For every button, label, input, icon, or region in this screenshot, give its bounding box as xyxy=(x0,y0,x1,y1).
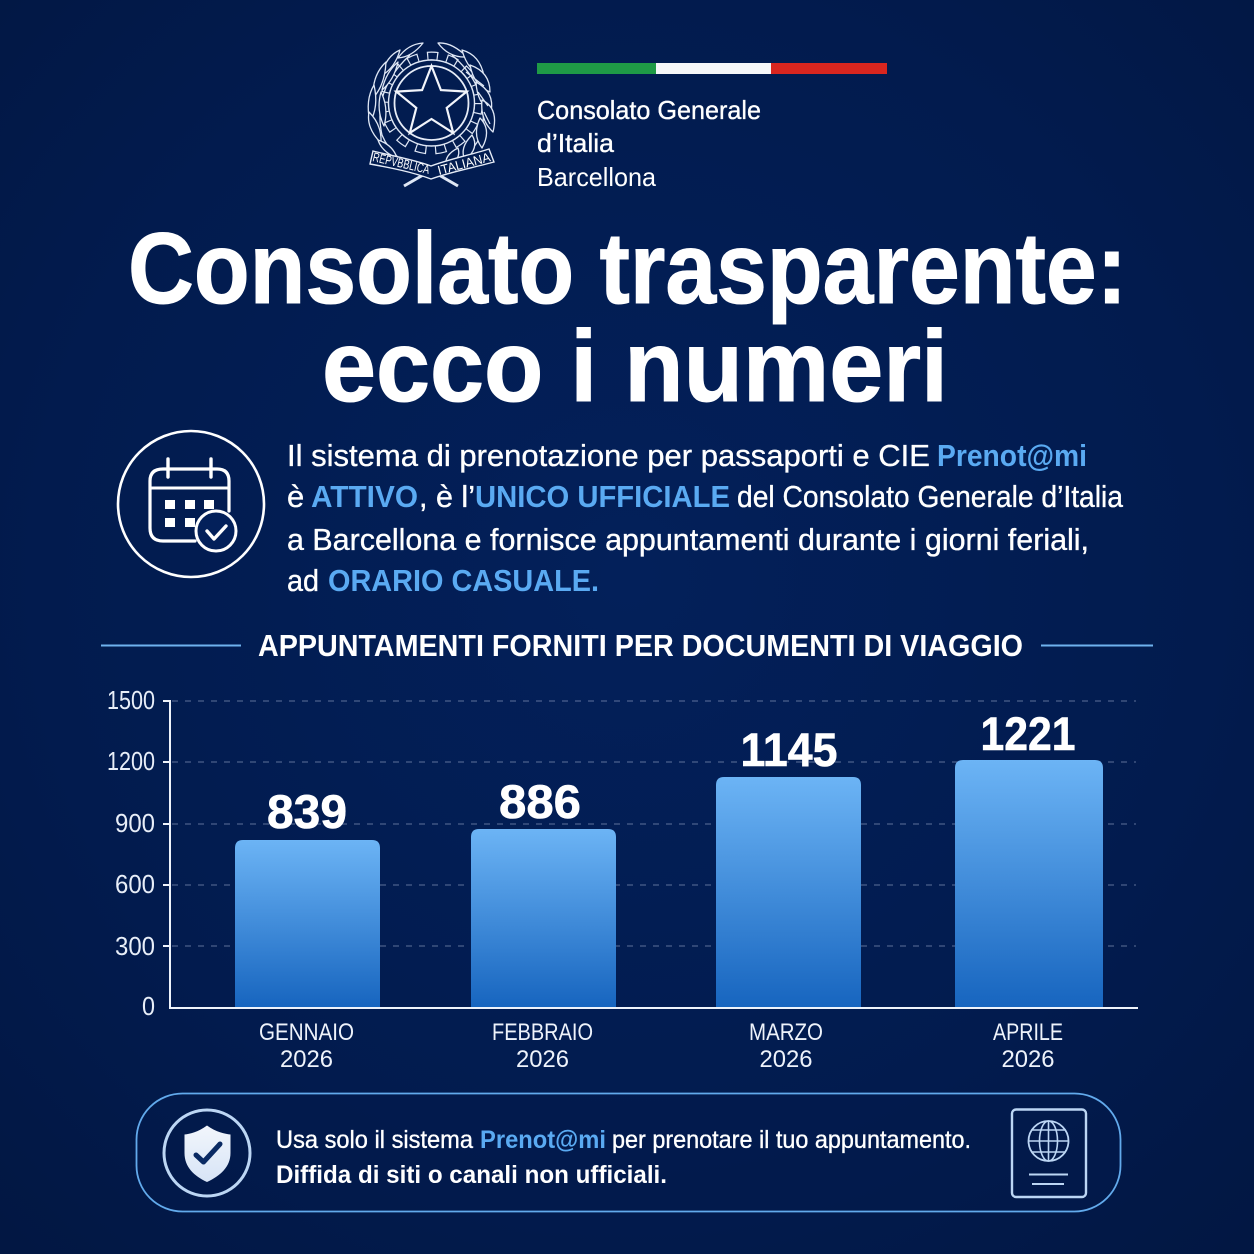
crossed branch ends xyxy=(404,171,458,186)
intro text: ad xyxy=(287,563,319,598)
month labels: APRILE xyxy=(993,1019,1063,1046)
bar: aprile 1221 xyxy=(955,707,1103,1007)
intro text: , è l’ xyxy=(419,479,475,514)
month labels: 2026 xyxy=(1002,1046,1054,1073)
icon: calendar with check xyxy=(118,431,264,577)
ribbon xyxy=(370,149,494,179)
ribbon lettering: REPVBBLICA xyxy=(371,149,431,177)
month labels: 2026 xyxy=(760,1046,812,1073)
intro text: a Barcellona e fornisce appuntamenti durante i giorni feriali, xyxy=(287,522,1089,557)
bar: marzo 1145: 1145 xyxy=(740,723,838,776)
intro text: è xyxy=(287,479,304,514)
header: consulate name: Barcellona xyxy=(537,162,657,192)
intro text: Il sistema di prenotazione per passaporti e CIE xyxy=(287,438,930,473)
panel: warning callout xyxy=(136,1094,1120,1212)
bar: gennaio 839: 839 xyxy=(267,785,347,838)
emblem: Repubblica Italiana xyxy=(368,43,495,186)
wheel ring xyxy=(394,66,468,140)
header: consulate name: Consolato Generale xyxy=(537,95,761,125)
bar: aprile 1221: 1221 xyxy=(980,707,1076,760)
right wreath xyxy=(432,43,495,178)
star xyxy=(396,66,467,133)
chart heading: APPUNTAMENTI FORNITI PER DOCUMENTI DI VIAGGIO xyxy=(258,628,1023,663)
month labels: 2026 xyxy=(516,1046,569,1073)
month labels: MARZO xyxy=(749,1019,823,1046)
callout text: Usa solo il sistema xyxy=(276,1126,473,1154)
callout text: Prenot@mi xyxy=(480,1126,606,1154)
left wreath xyxy=(368,43,430,178)
month labels: 2026 xyxy=(280,1046,333,1073)
y axis: 1500 xyxy=(107,685,155,715)
ribbon lettering right: ITALIANA xyxy=(436,149,492,178)
y axis: 600 xyxy=(115,869,155,899)
callout text: per prenotare il tuo appuntamento. xyxy=(612,1126,971,1154)
intro text: ATTIVO xyxy=(311,479,418,514)
bar: febbraio 886: 886 xyxy=(499,775,581,828)
intro text: UNICO UFFICIALE xyxy=(475,479,730,514)
month labels xyxy=(259,1019,1063,1073)
bar: marzo 1145 xyxy=(716,723,861,1007)
y axis: 300 xyxy=(115,931,155,961)
icon: passport xyxy=(1012,1110,1086,1197)
icon: shield with check xyxy=(164,1110,250,1196)
callout text: Diffida di siti o canali non ufficiali. xyxy=(276,1161,667,1189)
gear teeth xyxy=(384,56,478,150)
bar chart xyxy=(107,685,1138,1073)
intro text: del Consolato Generale d’Italia xyxy=(737,479,1124,514)
month labels: GENNAIO xyxy=(259,1019,354,1046)
header: flag bar xyxy=(537,63,887,74)
intro text: ORARIO CASUALE. xyxy=(328,563,599,598)
month labels: FEBBRAIO xyxy=(492,1019,593,1046)
header: consulate name: d’Italia xyxy=(537,128,615,158)
header: consulate name xyxy=(537,95,761,192)
title: ecco i numeri xyxy=(322,311,948,423)
y axis xyxy=(107,685,170,1021)
intro text: Prenot@mi xyxy=(937,438,1087,473)
y axis: 1200 xyxy=(107,746,155,776)
title xyxy=(128,213,1127,423)
bar: febbraio 886 xyxy=(471,775,616,1007)
y axis: 0 xyxy=(142,991,155,1021)
intro text xyxy=(287,438,1124,598)
y axis: 900 xyxy=(115,808,155,838)
title: Consolato trasparente: xyxy=(128,213,1127,325)
callout text xyxy=(276,1126,971,1189)
bar: gennaio 839 xyxy=(235,785,380,1007)
